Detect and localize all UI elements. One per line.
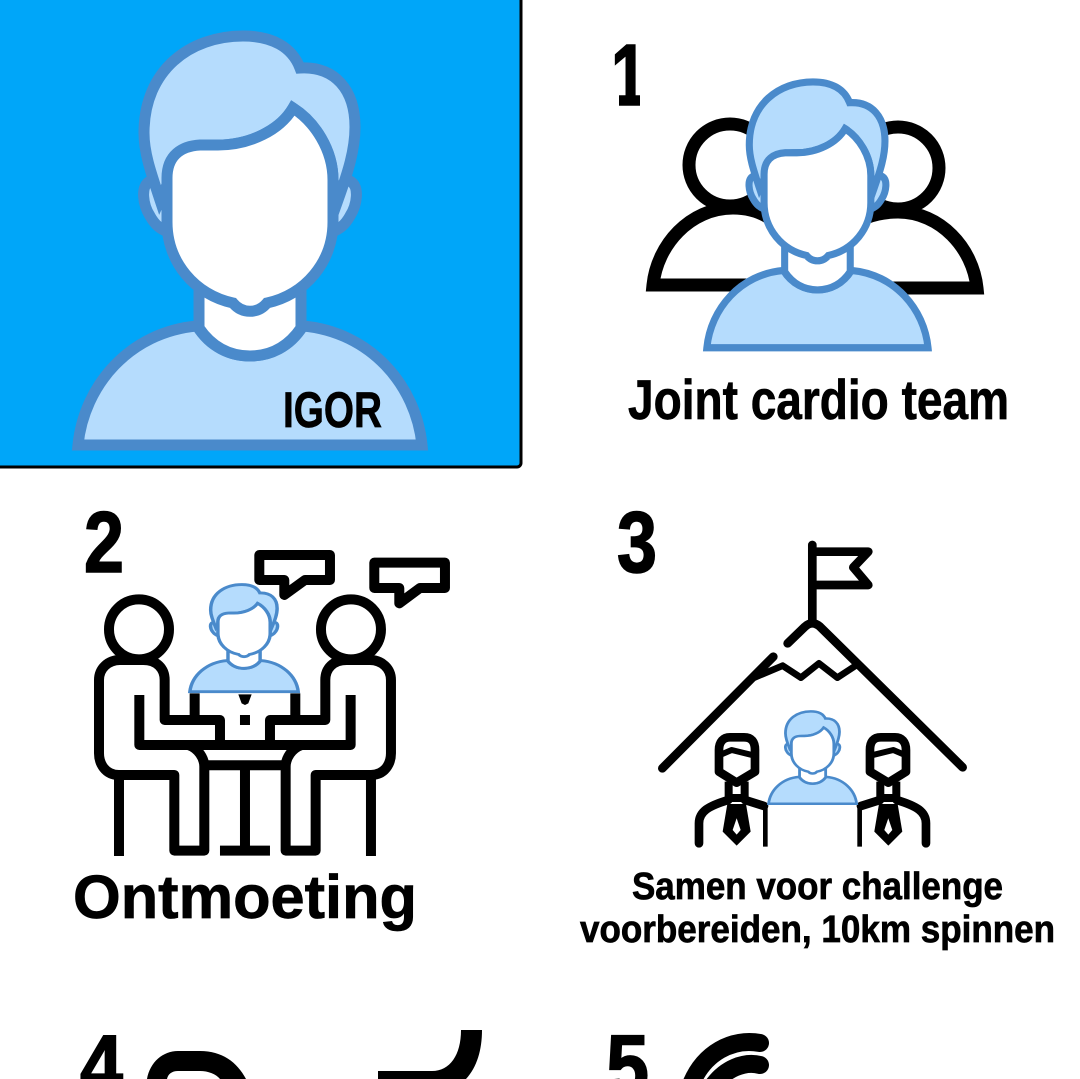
icon: team of three [653,82,977,348]
number 1: 1 [611,27,647,124]
icon: mountain with flag and team [662,545,963,847]
caption: Samen voor challenge voorbereiden, 10km spinnen: voorbereiden, 10km spinnen [580,909,1055,951]
label: IGOR: IGOR [283,382,382,438]
step 2: ontmoeting [73,495,445,931]
step 4: cropped row [80,1018,482,1079]
icon: meeting at a table [99,555,445,856]
number 3: 3 [617,495,657,591]
panel: Igor portrait [0,0,521,467]
step 5: cropped row [606,1018,760,1079]
step 1: joint cardio team [600,27,1009,431]
caption: Samen voor challenge voorbereiden, 10km spinnen: Samen voor challenge [632,866,1003,908]
icon: cropped arcs [690,1042,760,1079]
number 2: 2 [84,495,124,591]
heading: Ontmoeting: Ontmoeting [73,863,417,931]
icon: Igor avatar [78,36,422,445]
caption: Samen voor challenge voorbereiden, 10km spinnen [580,866,1055,951]
icon: cropped shapes [147,1030,482,1079]
step 3: samen voor challenge [580,495,1055,951]
heading: Joint cardio team: Joint cardio team [628,368,1009,431]
